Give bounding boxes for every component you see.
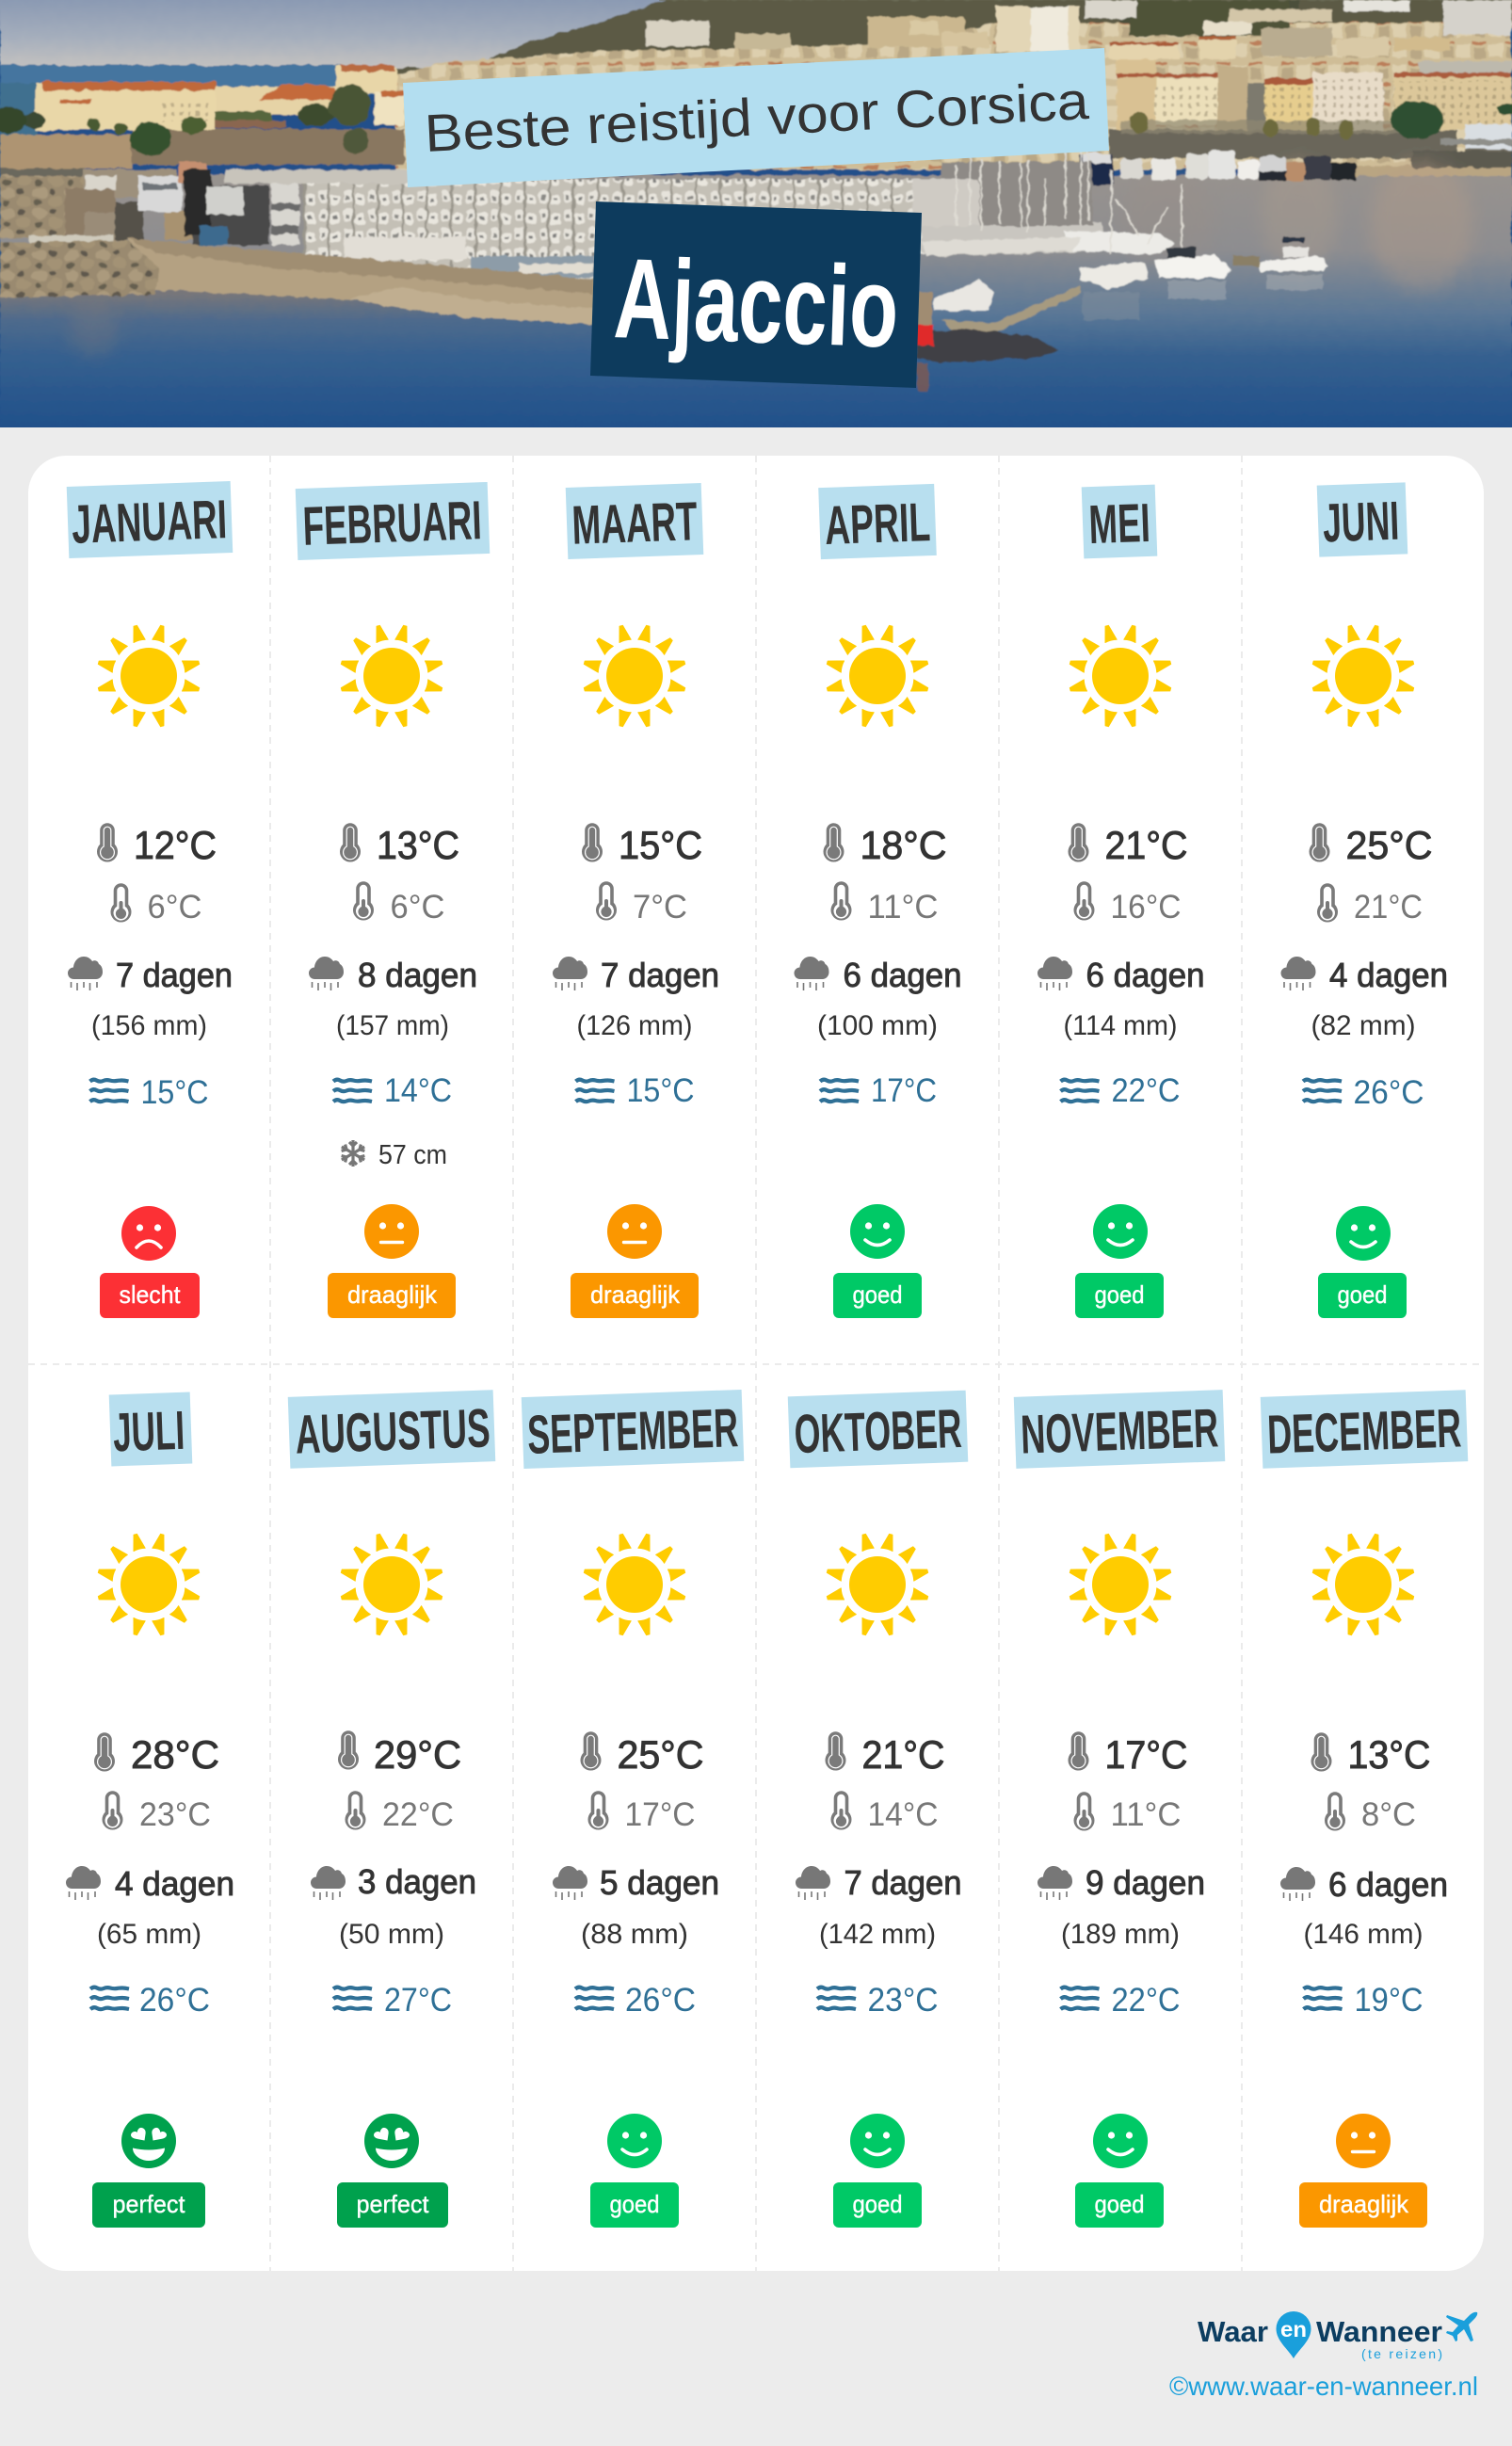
high temperature: 12°C bbox=[134, 823, 217, 867]
low temperature bbox=[1325, 1792, 1416, 1833]
hero photo: harbour of Ajaccio bbox=[0, 0, 1512, 427]
rating label: goed bbox=[853, 2190, 902, 2218]
high temperature bbox=[1309, 823, 1433, 867]
rain days bbox=[1037, 956, 1205, 994]
rainfall: (114 mm) bbox=[1064, 1010, 1177, 1041]
heading: februari: FEBRUARI bbox=[302, 490, 483, 557]
rating face bbox=[121, 2114, 176, 2168]
sea temperature: 26°C bbox=[625, 1982, 696, 2019]
rating label bbox=[833, 1273, 922, 1318]
sea temperature bbox=[333, 1072, 452, 1109]
sea temperature: 22°C bbox=[1111, 1982, 1181, 2019]
heading: november bbox=[1014, 1390, 1225, 1469]
heading: september bbox=[522, 1390, 744, 1469]
low temperature bbox=[353, 881, 444, 925]
high temperature: 18°C bbox=[861, 823, 947, 867]
rating label: goed bbox=[1094, 2190, 1145, 2218]
rating label: goed bbox=[1337, 1280, 1388, 1309]
rain days: 8 dagen bbox=[358, 956, 477, 994]
logo: Waar en Wanneer: Waar bbox=[1198, 2315, 1268, 2348]
heading: maart bbox=[566, 483, 703, 559]
heading: augustus: AUGUSTUS bbox=[295, 1397, 491, 1466]
high temperature: 28°C bbox=[131, 1732, 219, 1777]
rating label bbox=[100, 1273, 200, 1318]
rating label: goed bbox=[853, 1280, 902, 1309]
rating label bbox=[590, 2182, 679, 2228]
rating face bbox=[850, 2114, 905, 2168]
high temperature: 29°C bbox=[374, 1732, 461, 1777]
title text: Beste reistijd voor Corsica bbox=[423, 71, 1091, 163]
month: februari bbox=[296, 482, 490, 1318]
rating label bbox=[571, 1273, 699, 1318]
rain days bbox=[311, 1862, 476, 1901]
month: augustus bbox=[288, 1390, 495, 2228]
sea temperature: 17°C bbox=[871, 1072, 937, 1109]
rating face bbox=[121, 1206, 176, 1261]
low temperature: 6°C bbox=[147, 889, 201, 925]
rain days: 7 dagen bbox=[601, 956, 719, 994]
sea temperature: 26°C bbox=[1354, 1074, 1424, 1111]
low temperature: 14°C bbox=[868, 1796, 938, 1833]
rain days: 7 dagen bbox=[116, 956, 233, 994]
rain days: 4 dagen bbox=[1329, 956, 1448, 994]
rating label: draaglijk bbox=[1319, 2190, 1409, 2218]
rating label bbox=[337, 2182, 448, 2228]
high temperature bbox=[1068, 823, 1188, 867]
high temperature bbox=[823, 823, 947, 867]
rain days bbox=[309, 956, 477, 994]
high temperature bbox=[97, 823, 217, 867]
snow depth bbox=[340, 1140, 447, 1170]
sea temperature: 27°C bbox=[384, 1982, 452, 2019]
title banner bbox=[403, 48, 1109, 187]
heading: augustus bbox=[288, 1390, 495, 1469]
heading: januari bbox=[67, 481, 233, 558]
high temperature: 13°C bbox=[377, 823, 459, 867]
rainfall: (156 mm) bbox=[91, 1010, 207, 1041]
sea temperature bbox=[333, 1982, 452, 2019]
rating label bbox=[1075, 2182, 1164, 2228]
rain days: 9 dagen bbox=[1086, 1863, 1205, 1902]
sea temperature: 22°C bbox=[1111, 1072, 1181, 1109]
low temperature bbox=[111, 883, 201, 925]
rain days bbox=[795, 956, 962, 994]
icon: sun bbox=[340, 624, 443, 728]
month: december bbox=[1261, 1390, 1468, 2228]
snow depth: 57 cm bbox=[378, 1140, 447, 1170]
icon: map pin bbox=[1277, 2311, 1311, 2358]
high temperature: 21°C bbox=[862, 1732, 945, 1777]
sea temperature bbox=[1303, 1074, 1424, 1111]
month: oktober bbox=[788, 1391, 968, 2228]
month: juli bbox=[66, 1392, 234, 2228]
rainfall: (157 mm) bbox=[336, 1010, 449, 1041]
sea temperature bbox=[820, 1072, 937, 1109]
low temperature: 21°C bbox=[1354, 889, 1423, 925]
city banner bbox=[590, 201, 922, 388]
rating face bbox=[607, 1204, 662, 1259]
low temperature: 8°C bbox=[1361, 1796, 1416, 1833]
heading: februari bbox=[296, 482, 490, 560]
icon: sun bbox=[1311, 624, 1415, 728]
icon: sun bbox=[583, 1533, 686, 1636]
low temperature bbox=[1073, 881, 1181, 925]
heading: juli bbox=[109, 1392, 192, 1466]
logo: Waar en Wanneer bbox=[1198, 2311, 1477, 2361]
heading: juni: JUNI bbox=[1322, 491, 1400, 554]
rating label: draaglijk bbox=[590, 1280, 681, 1309]
high temperature bbox=[825, 1731, 945, 1777]
month: april bbox=[795, 484, 962, 1318]
rainfall: (88 mm) bbox=[581, 1919, 688, 1950]
sea temperature bbox=[575, 1982, 696, 2019]
low temperature bbox=[830, 881, 938, 925]
sea temperature: 23°C bbox=[868, 1982, 938, 2019]
rating face bbox=[364, 2114, 419, 2168]
rain days bbox=[68, 956, 233, 994]
rainfall: (142 mm) bbox=[819, 1919, 936, 1950]
rainfall: (82 mm) bbox=[1311, 1010, 1416, 1041]
rain days bbox=[553, 956, 719, 994]
icon: sun bbox=[340, 1533, 443, 1636]
logo: Waar en Wanneer: (te reizen) bbox=[1361, 2346, 1442, 2361]
panel: monthly climate table bbox=[28, 456, 1484, 2271]
icon: sun bbox=[1311, 1533, 1415, 1636]
icon: sun bbox=[826, 1533, 929, 1636]
rain days: 5 dagen bbox=[600, 1863, 719, 1902]
heading: oktober bbox=[788, 1391, 968, 1468]
heading: mei bbox=[1082, 485, 1157, 558]
high temperature: 17°C bbox=[1105, 1732, 1188, 1777]
heading: januari: JANUARI bbox=[71, 489, 228, 555]
month: september bbox=[522, 1390, 744, 2228]
low temperature bbox=[596, 881, 687, 925]
rating face bbox=[1093, 2114, 1148, 2168]
icon: sun bbox=[97, 1533, 201, 1636]
rain days bbox=[1280, 956, 1448, 994]
low temperature bbox=[1317, 883, 1423, 925]
low temperature: 6°C bbox=[390, 889, 444, 925]
icon: sun bbox=[583, 624, 686, 728]
high temperature bbox=[1311, 1732, 1431, 1777]
rainfall: (65 mm) bbox=[97, 1919, 201, 1950]
rainfall: (146 mm) bbox=[1303, 1919, 1424, 1950]
low temperature bbox=[587, 1791, 695, 1833]
heading: maart: MAART bbox=[571, 491, 699, 556]
high temperature: 21°C bbox=[1105, 823, 1188, 867]
rating label bbox=[328, 1273, 456, 1318]
sea temperature: 15°C bbox=[627, 1072, 695, 1109]
rating label: goed bbox=[1094, 1280, 1145, 1309]
low temperature: 7°C bbox=[633, 889, 687, 925]
high temperature bbox=[582, 823, 702, 867]
low temperature: 11°C bbox=[868, 889, 938, 925]
high temperature: 15°C bbox=[619, 823, 702, 867]
rainfall: (100 mm) bbox=[817, 1010, 938, 1041]
low temperature: 23°C bbox=[139, 1796, 211, 1833]
rating label: draaglijk bbox=[347, 1280, 438, 1309]
high temperature bbox=[340, 823, 459, 867]
rain days: 6 dagen bbox=[844, 956, 962, 994]
low temperature: 11°C bbox=[1111, 1796, 1181, 1833]
sea temperature bbox=[576, 1072, 695, 1109]
heading: april bbox=[818, 484, 937, 559]
low temperature bbox=[1073, 1792, 1181, 1833]
high temperature: 25°C bbox=[618, 1732, 704, 1777]
high temperature: 13°C bbox=[1348, 1732, 1431, 1777]
rain days: 3 dagen bbox=[358, 1862, 476, 1901]
rating face bbox=[1093, 1204, 1148, 1259]
rating face bbox=[1336, 2114, 1391, 2168]
high temperature bbox=[580, 1731, 704, 1777]
month: januari bbox=[67, 481, 233, 1318]
rain days bbox=[796, 1863, 962, 1902]
low temperature bbox=[830, 1791, 938, 1833]
rating label bbox=[1299, 2182, 1427, 2228]
month: november bbox=[1014, 1390, 1225, 2228]
heading: mei: MEI bbox=[1087, 492, 1151, 555]
high temperature bbox=[338, 1730, 461, 1777]
sea temperature bbox=[1303, 1982, 1424, 2019]
heading: april: APRIL bbox=[824, 491, 931, 556]
rain days: 4 dagen bbox=[115, 1864, 234, 1903]
city name: Ajaccio bbox=[612, 233, 901, 372]
low temperature bbox=[102, 1791, 211, 1833]
rating face bbox=[1336, 1206, 1391, 1261]
low temperature: 22°C bbox=[382, 1796, 454, 1833]
rain days: 6 dagen bbox=[1328, 1865, 1448, 1904]
month: juni bbox=[1280, 482, 1448, 1318]
month: mei bbox=[1037, 485, 1205, 1318]
icon: plane bbox=[1446, 2312, 1477, 2341]
low temperature bbox=[345, 1791, 454, 1833]
icon: sun bbox=[97, 624, 201, 728]
sea temperature bbox=[90, 1982, 210, 2019]
heading: september: SEPTEMBER bbox=[526, 1397, 739, 1466]
rain days: 7 dagen bbox=[844, 1863, 962, 1902]
sea temperature bbox=[817, 1982, 938, 2019]
sea temperature bbox=[90, 1074, 209, 1111]
rating label: goed bbox=[610, 2190, 659, 2218]
heading: november: NOVEMBER bbox=[1020, 1397, 1219, 1466]
rating label bbox=[833, 2182, 922, 2228]
heading: oktober: OKTOBER bbox=[794, 1398, 963, 1465]
sea temperature: 14°C bbox=[384, 1072, 452, 1109]
rainfall: (189 mm) bbox=[1061, 1919, 1180, 1950]
logo: Waar en Wanneer: Wanneer bbox=[1316, 2315, 1442, 2348]
rating face bbox=[850, 1204, 905, 1259]
heading: juni bbox=[1317, 482, 1407, 557]
rating label: perfect bbox=[356, 2190, 429, 2218]
rain days bbox=[66, 1864, 234, 1903]
rating label bbox=[92, 2182, 205, 2228]
website credit: ©www.waar-en-wanneer.nl bbox=[1169, 2372, 1478, 2401]
low temperature: 16°C bbox=[1111, 889, 1181, 925]
sea temperature bbox=[1060, 1072, 1181, 1109]
rain days: 6 dagen bbox=[1086, 956, 1205, 994]
rating label: slecht bbox=[119, 1280, 181, 1309]
icon: sun bbox=[1069, 1533, 1172, 1636]
sea temperature: 26°C bbox=[139, 1982, 210, 2019]
icon: map pin: en bbox=[1280, 2317, 1307, 2341]
month: maart bbox=[553, 483, 719, 1318]
rating face bbox=[364, 1204, 419, 1259]
rating label bbox=[1318, 1273, 1407, 1318]
heading: juli: JULI bbox=[112, 1400, 185, 1463]
sea temperature: 15°C bbox=[141, 1074, 209, 1111]
sea temperature bbox=[1060, 1982, 1181, 2019]
high temperature bbox=[1068, 1731, 1188, 1777]
rainfall: (126 mm) bbox=[576, 1010, 693, 1041]
rating face bbox=[607, 2114, 662, 2168]
high temperature: 25°C bbox=[1346, 823, 1433, 867]
rating label bbox=[1075, 1273, 1164, 1318]
low temperature: 17°C bbox=[625, 1796, 695, 1833]
rainfall: (50 mm) bbox=[339, 1919, 444, 1950]
icon: sun bbox=[1069, 624, 1172, 728]
sea temperature: 19°C bbox=[1354, 1982, 1424, 2019]
rating label: perfect bbox=[113, 2190, 185, 2218]
icon: sun bbox=[826, 624, 929, 728]
